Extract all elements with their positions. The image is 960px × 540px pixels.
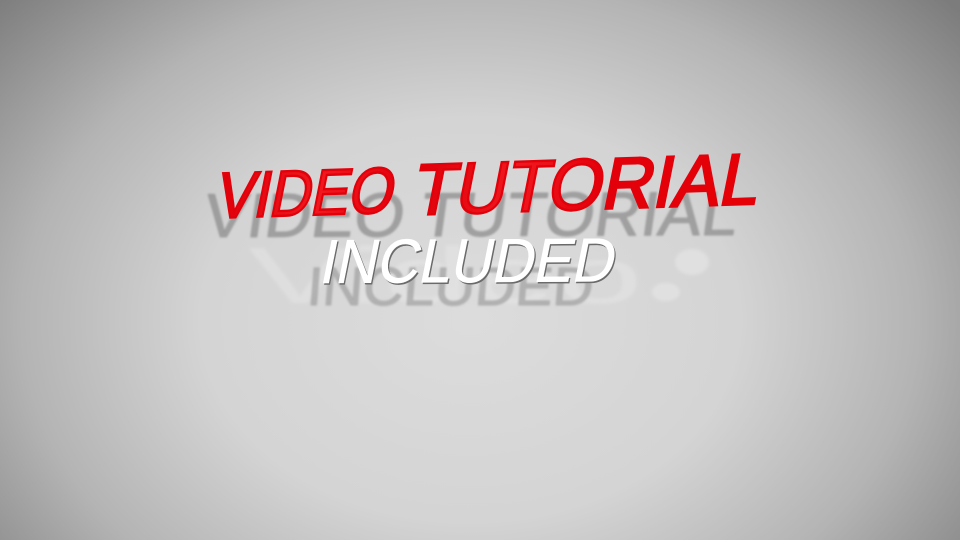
heading: VIDEO TUTORIAL: TUTORIAL: [407, 138, 769, 231]
faint watermark word: Video: [248, 231, 643, 320]
subheading: INCLUDED: INCLUDED: [315, 226, 623, 297]
shadow: INCLUDED: INCLUDED: [305, 257, 596, 317]
heading: VIDEO TUTORIAL: VIDEO: [211, 154, 403, 232]
faint watermark word: [248, 231, 709, 320]
shadow: VIDEO TUTORIAL: VIDEO TUTORIAL: [200, 180, 743, 251]
heading: VIDEO TUTORIAL: [211, 138, 769, 232]
subheading: INCLUDED: INCLUDED: [316, 227, 624, 298]
